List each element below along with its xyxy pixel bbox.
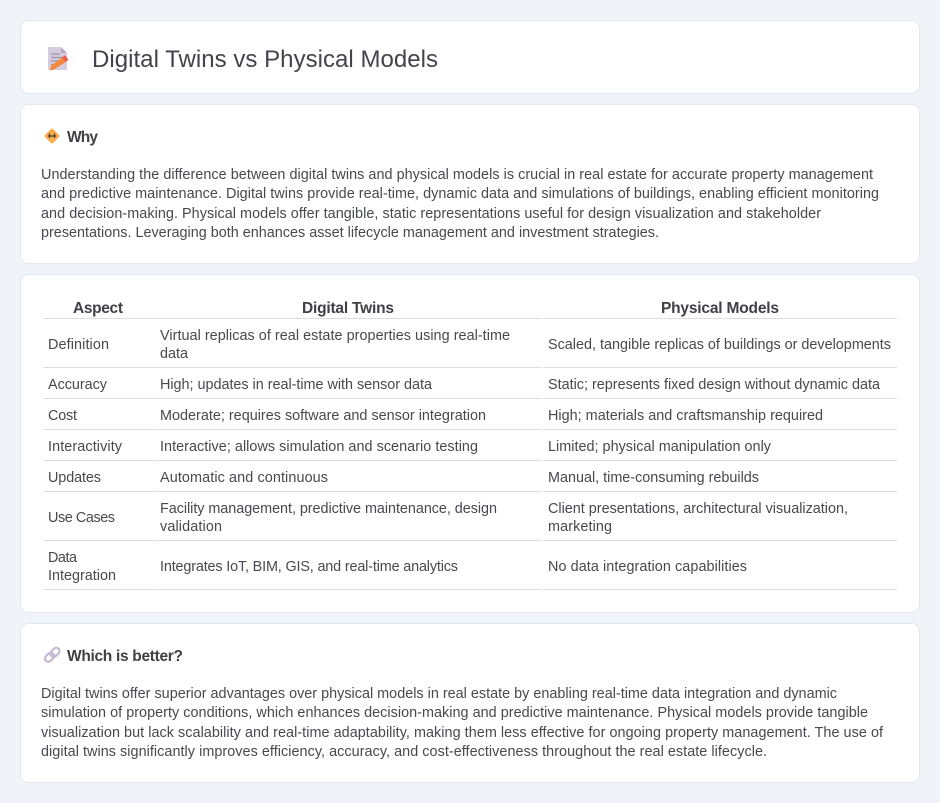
row: cost — [48, 408, 823, 424]
icon: memo with pencil — [48, 47, 68, 70]
panel: why — [20, 104, 920, 264]
row: interactivity: Interactivity — [48, 439, 123, 455]
row: accuracy: Accuracy — [48, 377, 108, 393]
table header row: Physical Models — [661, 300, 779, 317]
row: updates: Updates — [48, 470, 101, 486]
row: accuracy: Static; represents fixed design without dynamic data — [548, 377, 880, 393]
row: cost: High; materials and craftsmanship required — [548, 408, 823, 424]
text block: why paragraph: and decision-making. Physical models offer tangible, static representations useful for design visualization and stakeholder — [41, 206, 821, 222]
row: definition: Scaled, tangible replicas of buildings or developments — [548, 337, 891, 353]
row: definition: Virtual replicas of real estate properties using real-time — [160, 328, 510, 344]
heading: why: Why — [67, 129, 98, 146]
row: updates: Manual, time-consuming rebuilds — [548, 470, 759, 486]
panel: which is better — [20, 624, 920, 782]
text block: why paragraph: presentations. Leveraging both enhances asset lifecycle management and investment strategies. — [41, 225, 659, 241]
row: interactivity: Interactive; allows simulation and scenario testing — [160, 439, 478, 455]
row: data integration: Integration — [48, 568, 116, 584]
icon: orange diamond warning sign — [44, 128, 60, 144]
table header row: Digital Twins — [302, 300, 394, 317]
row: definition: data — [160, 346, 188, 362]
text block: why paragraph: Understanding the difference between digital twins and physical models is crucial in real estate for accurate property management — [41, 167, 873, 183]
text block: which is better paragraph: digital twins significantly improves efficiency, accuracy, and cost-effectiveness throughout the real estate lifecycle. — [41, 744, 767, 760]
row: interactivity — [48, 439, 772, 455]
row: use cases: validation — [160, 519, 222, 535]
row: use cases: Use Cases — [48, 510, 115, 526]
table header row: Aspect — [73, 300, 123, 317]
panel: title header — [20, 20, 920, 94]
row: data integration — [48, 550, 747, 584]
row: data integration: No data integration capabilities — [548, 559, 747, 575]
text block: why paragraph: and predictive maintenance. Digital twins provide real-time, dynamic data and simulations of buildings, enabling efficient monitoring — [41, 186, 879, 202]
text block: which is better paragraph: Digital twins offer superior advantages over physical models in real estate by enabling real-time data integration and dynamic — [41, 686, 837, 702]
row: cost: Moderate; requires software and sensor integration — [160, 408, 486, 424]
icon: chain link — [44, 646, 61, 663]
text block: why paragraph — [41, 167, 879, 241]
row: use cases — [48, 501, 848, 535]
row: definition: Definition — [48, 337, 109, 353]
row: updates: Automatic and continuous — [160, 470, 328, 486]
text block: which is better paragraph: visualization but lack scalability and real-time adaptability, making them less effective for ongoing property management. The use of — [41, 725, 884, 741]
row: cost: Cost — [48, 408, 77, 424]
row: data integration: Integrates IoT, BIM, GIS, and real-time analytics — [160, 559, 458, 575]
row: accuracy: High; updates in real-time with sensor data — [160, 377, 432, 393]
row: accuracy — [48, 377, 880, 393]
row: use cases: marketing — [548, 519, 612, 535]
row: interactivity: Limited; physical manipulation only — [548, 439, 772, 455]
row: data integration: Data — [48, 550, 77, 566]
title: Digital Twins vs Physical Models — [92, 46, 438, 73]
row: updates — [48, 470, 759, 486]
table header row — [73, 300, 779, 317]
row: use cases: Facility management, predictive maintenance, design — [160, 501, 497, 517]
row: use cases: Client presentations, architectural visualization, — [548, 501, 848, 517]
text block: which is better paragraph — [41, 686, 884, 760]
row: definition — [48, 328, 891, 362]
panel: comparison table — [20, 274, 920, 612]
heading: which is better: Which is better? — [67, 648, 183, 665]
text block: which is better paragraph: simulation of property conditions, which enhances decision-making and predictive maintenance. Physical models provide tangible — [41, 705, 868, 721]
